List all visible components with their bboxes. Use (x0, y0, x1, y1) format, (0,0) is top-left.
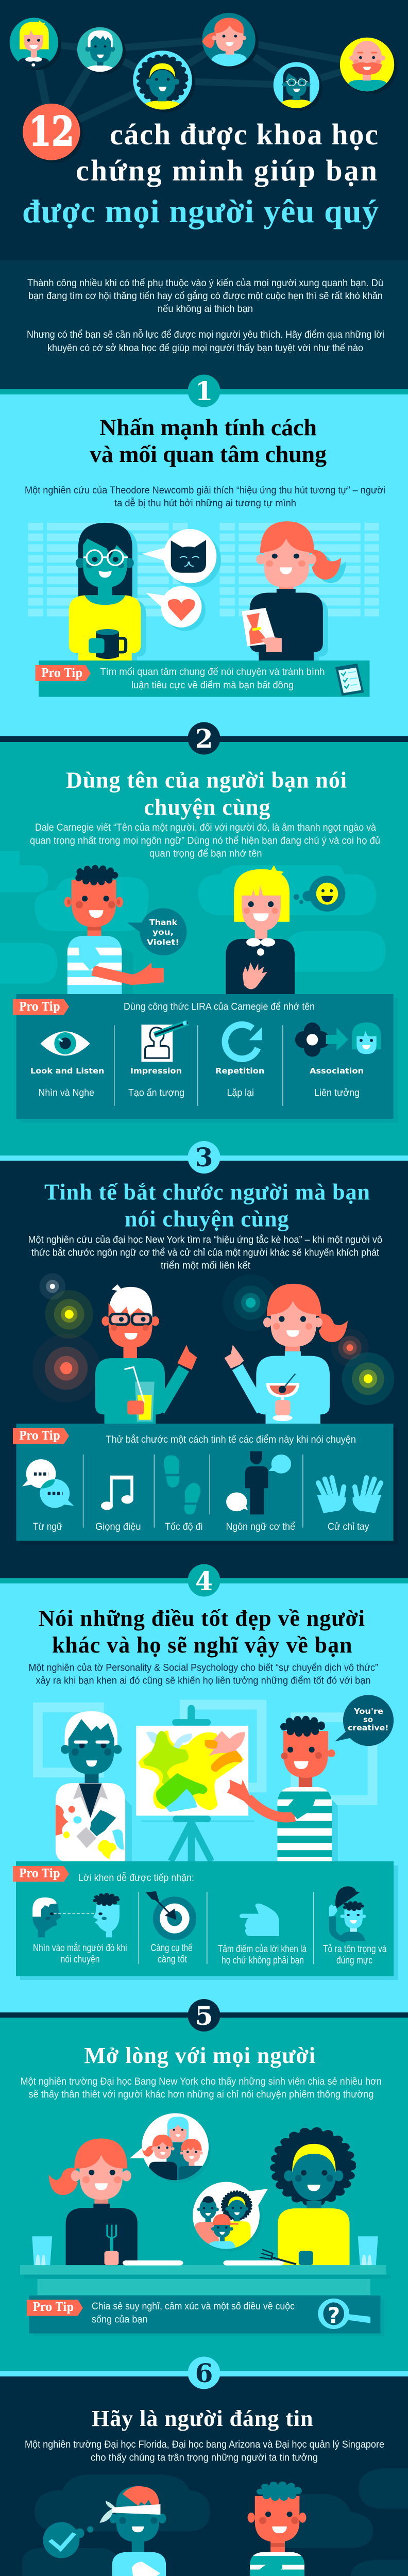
pro tip panel 4: Tỏ ra tôn trọng và (323, 1943, 387, 1955)
avatar: bearded man (340, 38, 394, 92)
pro tip panel 2 (13, 994, 398, 1122)
number badge 6 (188, 2356, 220, 2389)
pro tip panel 4: Càng cụ thể (150, 1942, 193, 1954)
glow lights (32, 1273, 394, 1405)
coffee mug (89, 629, 126, 659)
pro tip badge: Pro Tip (19, 1000, 60, 1014)
blindfolded person (99, 2486, 166, 2576)
heading 3 (44, 1180, 370, 1231)
icon: association (295, 1022, 381, 1056)
body text 6 (25, 2439, 384, 2464)
pro tip panel 2: Association (310, 1066, 364, 1076)
avatar: red-haired woman (202, 13, 256, 68)
pro tip badge: Pro Tip (41, 666, 82, 680)
pro tip panel 2: Repetition (215, 1066, 265, 1076)
afro woman with fork (223, 2130, 352, 2266)
pro tip panel 4: Lời khen dễ được tiếp nhận: (78, 1872, 194, 1884)
pro tip panel 3: Tốc độ đi (165, 1521, 203, 1532)
body text 6: Một nghiên trường Đại học Florida, Đại học bang Arizona và Đại học quản lý Singapore (25, 2439, 384, 2450)
heading 1 (90, 414, 327, 467)
heading 2: chuyện cùng (144, 795, 270, 820)
section 1 (0, 374, 408, 736)
intro text (27, 277, 384, 354)
woman with glasses (69, 523, 146, 660)
thought bubbles with families (130, 2113, 268, 2252)
section 2 (0, 722, 408, 1155)
body text 2 (30, 822, 380, 859)
pro tip panel 3: Ngôn ngữ cơ thể (226, 1521, 295, 1532)
body text 6: cho thấy chúng ta trân trọng những người ta tin tưởng (91, 2452, 318, 2464)
speech bubble: you're so creative (335, 1695, 394, 1746)
body text 1 (25, 485, 385, 509)
number 12: 12 (29, 108, 74, 155)
thank you text: Violet! (147, 937, 179, 947)
intro text: Thành công nhiều khi có thể phụ thuộc vào ý kiến của mọi người xung quanh bạn. Dù (27, 277, 383, 289)
easel and painting (136, 1709, 254, 1861)
artist (56, 1711, 132, 1861)
thank you text (147, 918, 179, 947)
bubble: friends group 2 (193, 2182, 268, 2252)
you're so creative text: creative! (348, 1723, 388, 1732)
thank you text: you, (152, 928, 174, 937)
heading 3: Tinh tế bắt chước người mà bạn (44, 1180, 370, 1204)
pro tip badge: Pro Tip (33, 2300, 74, 2314)
number badge 1: 1 (195, 376, 213, 406)
pro tip panel 3 (13, 1424, 398, 1545)
icon: clipboard (335, 664, 364, 696)
pro tip panel 3: Giọng điệu (95, 1521, 141, 1532)
avatar: white-haired man (77, 27, 123, 74)
pro tip panel 5: Chia sẻ suy nghĩ, cảm xúc và một số điều về cuộc (92, 2301, 295, 2312)
icon: music note (101, 1476, 133, 1510)
table (20, 2265, 390, 2295)
icon: magnifying glass (320, 2301, 370, 2328)
pro tip panel 4: họ chứ không phải bạn (222, 1955, 304, 1966)
number badge 5: 5 (195, 2001, 213, 2031)
pro tip badge: Pro Tip (19, 1429, 60, 1443)
woman with cocktail (225, 1284, 348, 1424)
pro tip panel 2: Look and Listen (30, 1066, 104, 1076)
heading 2 (66, 767, 347, 820)
badge circle (23, 104, 80, 160)
pro tip panel 4: Nhìn vào mắt người đó khi (33, 1942, 127, 1954)
pro tip panel 5 (27, 2296, 384, 2336)
icon: man tipping hat (329, 1886, 366, 1941)
icon: repetition (225, 1025, 262, 1059)
heading 5: Mở lòng với mọi người (84, 2043, 315, 2068)
avatar: glasses woman (274, 62, 319, 109)
intro text: Nhưng có thể bạn sẽ cần nỗ lực để được mọi người yêu thích. Hãy điểm qua những lời (27, 328, 384, 340)
pro tip panel 3: Thử bắt chước một cách tinh tế các điểm này khi nói chuyện (106, 1433, 356, 1445)
illustration: two friends and cat (36, 521, 372, 660)
pro tip panel 4: đúng mực (336, 1955, 372, 1966)
pro tip panel 1: Tìm mối quan tâm chung để nói chuyện và tránh bình (100, 666, 325, 678)
trusting man (248, 2484, 307, 2576)
body text 1: ta dễ bị thu hút bởi những ai tương tự mình (114, 497, 296, 509)
number badge 3 (188, 1141, 220, 1174)
title (22, 118, 379, 229)
glass and plate left (32, 2236, 183, 2266)
body text 2: quan trọng nhất trong mọi ngôn ngữ” Dùng nó thể hiện bạn đang chú ý và coi họ đủ (30, 835, 380, 847)
pro tip panel 1 (35, 660, 370, 697)
intro text: khuyên có cớ sở khoa học để giúp mọi người thấy bạn tuyệt vời như thế nào (47, 342, 363, 354)
bubble: friends group 1 (130, 2113, 211, 2183)
title: cách được khoa học (110, 118, 378, 151)
pro tip panel 4: Tâm điểm của lời khen là (218, 1943, 307, 1955)
avatar network (10, 13, 397, 163)
header section (0, 0, 408, 389)
pro tip panel 2: Liên tưởng (314, 1087, 360, 1098)
illustration: two friends sharing (32, 2130, 378, 2266)
body text 3: triển một mối liên kết (161, 1260, 251, 1272)
body text 5: Một nghiên trường Đại học Bang New York cho thấy những sinh viên chia sẻ nhiều hơn (21, 2076, 382, 2087)
pro tip panel 2: Nhìn và Nghe (38, 1087, 94, 1098)
number badge 5 (188, 1999, 220, 2032)
body text 5 (21, 2076, 382, 2100)
body text 4 (29, 1662, 378, 1686)
pro tip panel 3: Từ ngữ (33, 1521, 63, 1532)
heading 1: và mối quan tâm chung (90, 441, 327, 467)
intro text: bạn đang tìm cơ hội thăng tiến hay cố gắng có được một cuộc hẹn thì sẽ rất khó khăn (28, 290, 383, 302)
pro tip panel 4: nói chuyện (61, 1954, 100, 1965)
woman with fork (49, 2138, 138, 2265)
number badge 6: 6 (195, 2358, 213, 2388)
icon: impression (141, 1021, 188, 1062)
pro tip badge: Pro Tip (19, 1867, 60, 1880)
pro tip panel 2: Dùng công thức LIRA của Carnegie để nhớ tên (124, 1001, 315, 1013)
icon: eye (40, 1031, 90, 1055)
icon: magnifying glass: ? (328, 2303, 340, 2328)
dividers and LIRA icons (40, 1021, 381, 1106)
body text 4: Một nghiên của tờ Personality & Social Psychology cho biết “sự chuyển dịch vô thức” (29, 1662, 378, 1674)
thought bubble: check mark (43, 2522, 93, 2558)
heading 4 (38, 1606, 365, 1658)
speech bubble: cat (142, 529, 221, 587)
body text 2: quan trọng để bạn nhớ tên (149, 848, 262, 859)
body text 2: Dale Carnegie viết “Tên của một người, đối với người đó, là âm thanh ngọt ngào và (35, 822, 376, 833)
body text 5: sẽ thấy thân thiết với người khác hơn những ai chỉ nói chuyện phiếm thông thường (29, 2089, 374, 2100)
icon: words (22, 1459, 74, 1508)
heading 3: nói chuyện cùng (125, 1207, 288, 1231)
heading 1: Nhấn mạnh tính cách (99, 414, 317, 440)
pro tip panel 2: Lặp lại (227, 1087, 254, 1098)
icon: body language (226, 1451, 291, 1514)
body text 3: thức bắt chước ngôn ngữ cơ thể và cử chỉ của một người khác sẽ khuyến khích phát (31, 1247, 380, 1258)
heading 4: Nói những điều tốt đẹp về người (38, 1606, 365, 1631)
pro tip panel 2: Tạo ấn tượng (128, 1087, 184, 1098)
thought bubble: smiley (294, 876, 345, 912)
avatar: blonde woman (10, 18, 58, 69)
heading 2: Dùng tên của người bạn nói (66, 767, 347, 793)
pro tip panel 5: sống của bạn (92, 2314, 147, 2325)
glass right (358, 2236, 378, 2265)
icon: pointing hand (240, 1904, 279, 1936)
number badge 1 (188, 374, 220, 407)
thank you text: Thank (149, 918, 178, 927)
heading 4: khác và họ sẽ nghĩ vậy về bạn (52, 1632, 352, 1658)
you're so creative text (348, 1707, 388, 1732)
title: chứng minh giúp bạn (76, 154, 377, 187)
pro tip panel 4 (13, 1861, 398, 1980)
heading 6: Hãy là người đáng tin (92, 2406, 313, 2431)
avatar: afro woman (133, 51, 192, 110)
illustration: mirroring at a party (32, 1273, 394, 1424)
number badge 2 (188, 722, 220, 755)
section 3 (0, 1141, 408, 1578)
icon: eye contact (32, 1895, 120, 1937)
body text 3: Một nghiên cứu của đại học New York tìm ra “hiệu ứng tắc kè hoa” – khi một người vô (28, 1233, 382, 1246)
number badge 4: 4 (195, 1566, 213, 1596)
body text 1: Một nghiên cứu của Theodore Newcomb giải thích “hiệu ứng thu hút tương tự” – người (25, 485, 385, 496)
pro tip panel 3: Cử chỉ tay (328, 1521, 369, 1532)
compliment icons (32, 1886, 366, 1964)
blonde woman (226, 865, 295, 994)
number badge 3: 3 (195, 1142, 213, 1173)
mirroring icons (22, 1451, 381, 1528)
pro tip panel 1: luận tiêu cực về điểm mà bạn bất đồng (131, 680, 294, 691)
number badge 2: 2 (195, 723, 213, 754)
section 5 (0, 1999, 408, 2371)
section 6 (0, 2356, 408, 2576)
speech bubble: heart (146, 586, 206, 631)
speech bubble: thank you (127, 908, 187, 955)
icon: hands (317, 1478, 381, 1513)
pro tip panel 2: Impression (130, 1066, 182, 1076)
illustration: trust (22, 2468, 408, 2576)
body text 3 (28, 1233, 382, 1272)
pro tip panel 4: càng tốt (158, 1954, 187, 1965)
man with curly hair (64, 868, 164, 996)
body text 4: xảy ra khi bạn khen ai đó cũng sẽ khiến họ liên tưởng những điểm tốt đó với bạn (36, 1675, 371, 1686)
number badge 4 (188, 1564, 220, 1596)
icon: footprints (164, 1455, 200, 1514)
you're so creative text: You're (353, 1707, 383, 1716)
illustration: name greeting (0, 851, 385, 996)
woman with phone (242, 521, 346, 660)
intro text: nếu không ai thích bạn (158, 303, 253, 315)
icon: target with arrow (146, 1891, 196, 1940)
man pointing at painting (227, 1720, 338, 1862)
you're so creative text: so (363, 1715, 373, 1724)
illustration: compliment at gallery (38, 1695, 394, 1862)
man with glasses (95, 1284, 197, 1424)
section 4 (0, 1564, 408, 2012)
title: được mọi người yêu quý (22, 193, 379, 229)
